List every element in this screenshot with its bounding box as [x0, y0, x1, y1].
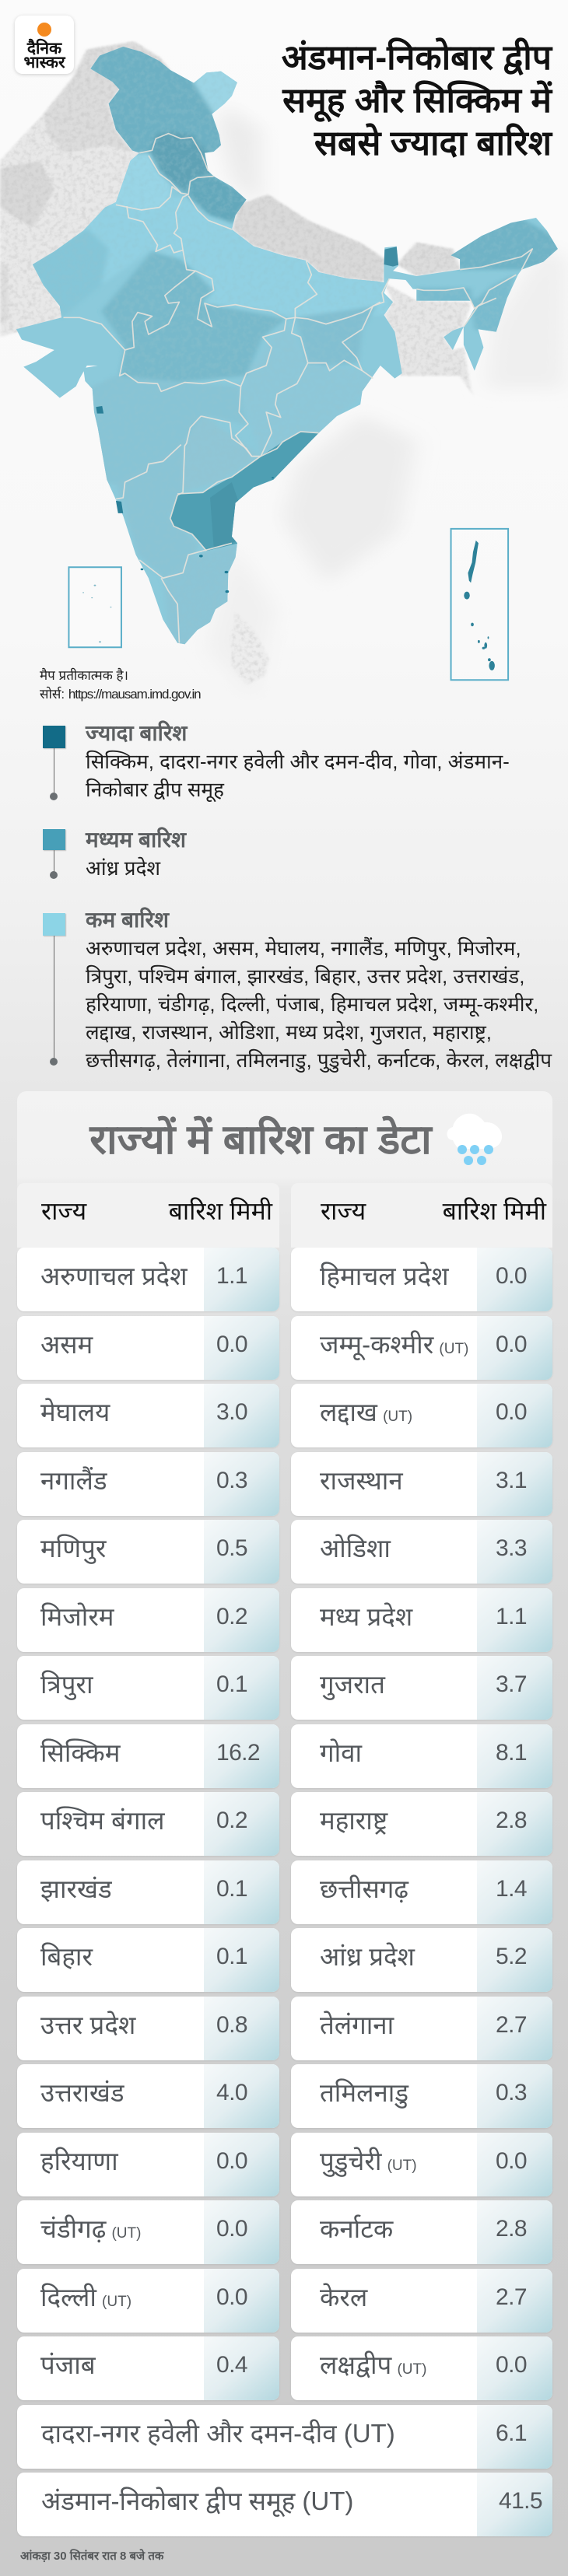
table rows: कर्नाटक [320, 2214, 393, 2243]
region: North-east [444, 212, 568, 270]
table header left: बारिश मिमी [169, 1197, 272, 1225]
table rows: 0.2 [216, 1808, 247, 1833]
table rows: 2.7 [496, 2011, 527, 2038]
legend: high rain marker [43, 726, 67, 800]
Sri Lanka [231, 612, 268, 684]
table header left: राज्य [41, 1197, 86, 1225]
table rows: मध्य प्रदेश [320, 1602, 412, 1630]
table rows: 0.3 [216, 1467, 247, 1493]
table rows: 2.7 [496, 2284, 527, 2310]
inset: Andaman and Nicobar [451, 529, 508, 680]
region: Aksai Chin light [194, 65, 247, 114]
region: Madhya Pradesh west shade [101, 251, 286, 383]
legend: medium rain heading: मध्यम बारिश [86, 828, 186, 852]
logo wordmark: दैनिक [27, 40, 61, 58]
table rows: 0.0 [216, 2148, 247, 2173]
table rows: सिक्किम [40, 1738, 120, 1767]
Pakistan plains [0, 114, 142, 337]
table rows: राजस्थान [320, 1465, 403, 1495]
table rows: 0.0 [496, 1263, 527, 1289]
region: Karnataka and south [116, 443, 199, 578]
table rows: 3.3 [496, 1535, 527, 1561]
logo wordmark [23, 39, 65, 72]
legend: high rain states: सिक्किम, दादरा-नगर हवेली और दमन-दीव, गोवा, अंडमान- [86, 750, 510, 773]
table rows: छत्तीसगढ़ [320, 1874, 408, 1902]
table header right [291, 1183, 552, 1248]
table rows: गोवा [320, 1738, 362, 1767]
table rows: मेघालय [40, 1398, 110, 1426]
table rows: 41.5 [499, 2488, 542, 2514]
table rows: मिजोरम [40, 1602, 114, 1630]
region: Rajasthan and UP [81, 198, 391, 315]
table rows: हरियाणा [40, 2147, 118, 2175]
legend: low rain states: लद्दाख, राजस्थान, ओडिशा, मध्य प्रदेश, गुजरात, महाराष्ट्र, [86, 1020, 492, 1044]
region: Jharkhand [295, 306, 377, 366]
table rows: 0.2 [216, 1604, 247, 1629]
legend: medium rain states: आंध्र प्रदेश [86, 856, 160, 880]
table rows: त्रिपुरा [40, 1670, 93, 1699]
region: Punjab [117, 153, 171, 202]
Bangladesh [384, 282, 475, 397]
table header right: राज्य [321, 1197, 366, 1225]
table rows: जम्मू-कश्मीर (UT) [320, 1330, 468, 1358]
map note and source: मैप प्रतीकात्मक है। [40, 668, 128, 683]
India base [16, 47, 558, 644]
table rows: 6.1 [496, 2420, 527, 2445]
table rows: तेलंगाना [320, 2010, 394, 2039]
table rows: 16.2 [216, 1739, 260, 1766]
table rows: 0.8 [216, 2011, 247, 2038]
table rows: पुडुचेरी (UT) [320, 2147, 417, 2175]
table rows: अंडमान-निकोबार द्वीप समूह (UT) [41, 2487, 353, 2515]
logo [15, 16, 74, 74]
region: Uttarakhand [188, 175, 254, 223]
table rows: गुजरात [320, 1670, 385, 1699]
table rows: 3.1 [496, 1467, 527, 1493]
table rows: 0.0 [216, 2216, 247, 2242]
table rows: 0.5 [216, 1535, 247, 1561]
legend: high rain states: निकोबार द्वीप समूह [86, 778, 224, 801]
terrain shadows [206, 103, 568, 700]
table rows: 5.2 [496, 1944, 527, 1969]
table rows: 4.0 [216, 2080, 247, 2105]
table rows: 0.0 [216, 2284, 247, 2310]
region: Himachal [150, 131, 214, 194]
region: Andhra Pradesh [170, 432, 326, 551]
legend: low rain marker [43, 913, 67, 1066]
terrain shading of states [22, 44, 568, 651]
region: J&K and Ladakh [90, 47, 221, 154]
legend: low rain states: छत्तीसगढ़, तेलंगाना, तमिलनाडु, पुडुचेरी, कर्नाटक, केरल, लक्षद्वीप [86, 1048, 552, 1072]
table rows: उत्तर प्रदेश [40, 2010, 135, 2039]
table rows: 0.0 [496, 2352, 527, 2378]
table rows: झारखंड [40, 1874, 112, 1902]
legend: low rain states: अरुणाचल प्रदेश, असम, मेघालय, नगालैंड, मणिपुर, मिजोरम, [86, 936, 521, 960]
legend: low rain states [86, 936, 552, 1073]
legend: low rain heading: कम बारिश [86, 908, 169, 932]
table rows: 1.1 [496, 1604, 527, 1629]
Puducherry enclaves [141, 477, 274, 593]
table rows: दादरा-नगर हवेली और दमन-दीव (UT) [41, 2419, 395, 2447]
table rows: 0.0 [496, 1332, 527, 1356]
table rows: 0.0 [496, 2148, 527, 2173]
mountains and neighbouring terrain [0, 41, 475, 684]
icon: rain cloud [447, 1114, 502, 1165]
table rows: 0.3 [496, 2080, 527, 2105]
panel heading: राज्यों में बारिश का डेटा [89, 1117, 432, 1163]
table rows: महाराष्ट्र [320, 1806, 387, 1835]
table rows: दिल्ली (UT) [40, 2282, 131, 2312]
table rows: उत्तराखंड [40, 2078, 124, 2107]
Dadra and Nagar Haveli and Daman Diu [96, 406, 103, 414]
table rows: 0.4 [216, 2352, 247, 2378]
table rows: अरुणाचल प्रदेश [40, 1262, 188, 1290]
table rows: हिमाचल प्रदेश [320, 1262, 449, 1290]
logo wordmark: भास्कर [23, 54, 65, 72]
table rows: 0.0 [496, 1399, 527, 1425]
region: Rajasthan west [33, 230, 107, 314]
table rows: आंध्र प्रदेश [320, 1942, 415, 1971]
data panel [17, 1091, 552, 1325]
table rows: पश्चिम बंगाल [40, 1806, 165, 1835]
table rows: लक्षद्वीप (UT) [320, 2350, 426, 2379]
table rows: 0.1 [216, 1876, 247, 1901]
mountains: Nepal [232, 194, 384, 282]
table rows [17, 1248, 552, 2537]
table rows: ओडिशा [320, 1534, 391, 1563]
table rows: असम [40, 1330, 93, 1358]
inset: Lakshadweep [68, 567, 121, 647]
legend: medium rain marker [43, 829, 67, 879]
map note and source: सोर्स: https://mausam.imd.gov.in [40, 687, 201, 702]
map of India [0, 40, 560, 684]
mountains north-west [44, 41, 170, 153]
Goa [116, 501, 123, 513]
legend: high rain states [86, 750, 510, 803]
title: समूह और सिक्किम में [282, 82, 552, 120]
table rows: 1.4 [496, 1876, 527, 1901]
table rows: बिहार [40, 1942, 93, 1971]
table rows: 2.8 [496, 1808, 527, 1833]
region: Chhattisgarh and Odisha [239, 321, 384, 457]
table rows: केरल [320, 2282, 367, 2312]
table rows: 0.1 [216, 1944, 247, 1969]
mountains: Bhutan [397, 243, 460, 276]
table rows: 0.1 [216, 1671, 247, 1697]
state borders [63, 134, 532, 643]
table header right: बारिश मिमी [443, 1197, 546, 1225]
legend: low rain states: हरियाणा, चंडीगढ़, दिल्ली, पंजाब, हिमाचल प्रदेश, जम्मू-कश्मीर, [86, 992, 538, 1016]
table rows: 3.7 [496, 1671, 527, 1697]
logo sun [37, 23, 51, 37]
footnote: आंकड़ा 30 सितंबर रात 8 बजे तक [20, 2550, 163, 2563]
table rows: लद्दाख (UT) [320, 1398, 412, 1426]
table rows: 3.0 [216, 1399, 247, 1425]
table rows: पंजाब [40, 2350, 96, 2379]
map note and source [40, 667, 201, 702]
table rows: चंडीगढ़ (UT) [40, 2214, 141, 2243]
title: अंडमान-निकोबार द्वीप [282, 39, 552, 77]
table rows: 8.1 [496, 1739, 527, 1766]
title: सबसे ज्यादा बारिश [314, 124, 552, 163]
legend: low rain states: त्रिपुरा, पश्चिम बंगाल, झारखंड, बिहार, उत्तर प्रदेश, उत्तराखंड, [86, 964, 524, 988]
table rows: नगालैंड [40, 1465, 107, 1495]
region: Maharashtra [87, 376, 247, 485]
table rows: 1.1 [216, 1263, 247, 1289]
table header left [17, 1183, 279, 1248]
legend: high rain heading: ज्यादा बारिश [86, 721, 187, 745]
Sikkim [384, 247, 398, 267]
table rows: 0.0 [216, 1332, 247, 1356]
title [282, 37, 552, 163]
table rows: तमिलनाडु [320, 2078, 408, 2107]
table rows: मणिपुर [40, 1534, 106, 1563]
table rows: 2.8 [496, 2216, 527, 2242]
